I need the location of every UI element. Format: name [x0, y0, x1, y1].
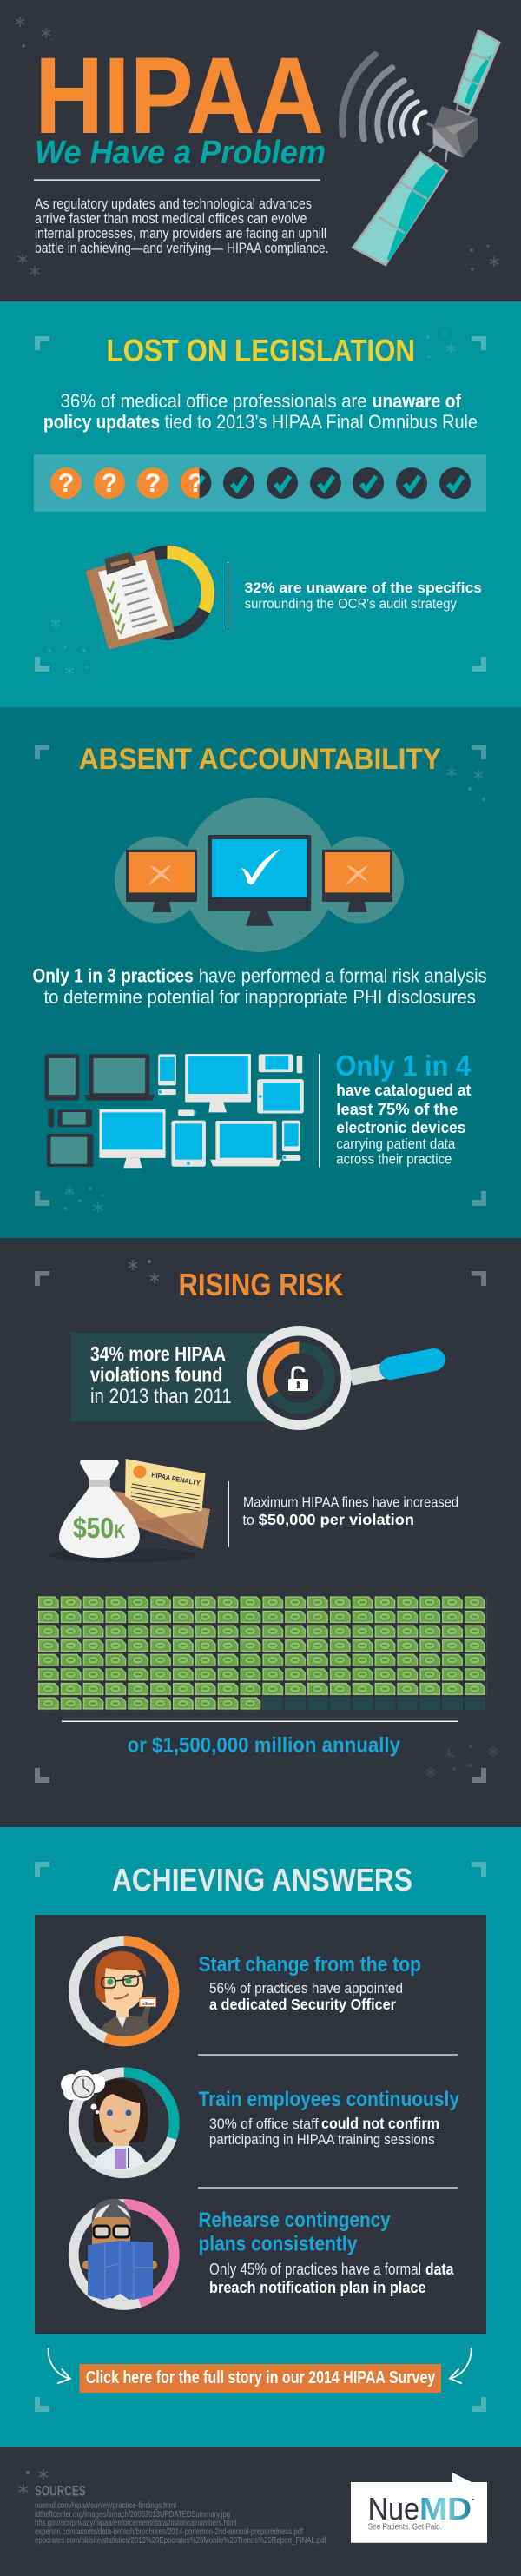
panel: header	[0, 0, 521, 301]
chart: 30% ring with doctor	[61, 2070, 175, 2173]
sources list: epocrates.com/oldsite/statistics/2013%20Epocrates%20Mobile%20Trends%20Report_FINAL.pdf	[35, 2535, 326, 2546]
callout: 34% more violations: in 2013 than 2011	[90, 1385, 232, 1408]
callout: 34% more violations: 34% more HIPAA	[90, 1343, 226, 1367]
recommendation text 1	[198, 1953, 421, 2013]
heading: LOST ON LEGISLATION	[106, 333, 415, 368]
icon: money bag and penalty letter: K	[115, 1520, 126, 1542]
icon group: devices	[45, 1054, 304, 1168]
stat text: 36% unaware: policy updates	[43, 411, 160, 433]
recommendation text 1: Start change from the top	[198, 1953, 421, 1977]
icon: money bag and penalty letter	[49, 1459, 210, 1562]
recommendation text 3: Only 45% of practices have a formal	[209, 2261, 421, 2278]
stat text: 1 in 4: electronic devices	[336, 1118, 465, 1136]
subtitle: We Have a Problem	[35, 135, 326, 171]
sources list: hhs.gov/ocr/privacy/hipaa/enforcement/data/historicalnumbers.html	[35, 2518, 236, 2528]
logo: NueMD	[351, 2473, 487, 2543]
icon bar: question marks and checks	[34, 454, 486, 512]
heading: ACHIEVING ANSWERS	[112, 1862, 412, 1897]
chart: 56% ring with officer	[74, 1941, 174, 2041]
arrow: left	[48, 2348, 70, 2383]
intro paragraph: internal processes, many providers are facing an uphill	[35, 226, 326, 242]
stat text: maximum fines: Maximum HIPAA fines have increased	[243, 1494, 458, 1510]
panel: footer	[0, 2447, 521, 2576]
stat text: maximum fines: to	[242, 1513, 254, 1528]
panel: absent accountability	[0, 707, 521, 1238]
logo: NueMD: Nue	[368, 2491, 419, 2526]
button: full story call to action: Click here for the full story in our 2014 HIPAA Survey	[86, 2368, 436, 2387]
panel: recommendations	[35, 1915, 486, 2334]
intro paragraph: battle in achieving—and verifying— HIPAA compliance.	[35, 241, 328, 256]
intro paragraph: As regulatory updates and technological advances	[35, 196, 312, 212]
sources list: experian.com/assets/data-breach/brochures/2014-ponemon-2nd-annual-preparedness.pdf	[35, 2526, 303, 2537]
panel: rising risk	[0, 1238, 521, 1827]
stat text: 1 in 3: to determine potential for inappropriate PHI disclosures	[43, 986, 476, 1008]
logo: NueMD: MD	[419, 2491, 472, 2526]
recommendation text 3: data	[425, 2261, 454, 2278]
stat text: 1 in 4: have catalogued at	[336, 1081, 471, 1099]
logo: NueMD: See Patients. Get Paid.	[368, 2522, 442, 2533]
sources list	[35, 2500, 326, 2546]
stat text: 1 in 4: across their practice	[336, 1152, 452, 1168]
sources list: nuemd.com/hipaa/survey/practice-findings.html	[35, 2500, 176, 2511]
stat text: 1 in 3: Only 1 in 3 practices	[33, 965, 194, 987]
recommendation text 1: a dedicated Security Officer	[209, 1996, 396, 2013]
icon: money bag and penalty letter: $50	[73, 1512, 114, 1544]
stat text: 1 in 4	[335, 1050, 472, 1168]
heading: RISING RISK	[179, 1267, 343, 1302]
stat text: 36% unaware	[43, 390, 478, 433]
recommendation text 2: Train employees continuously	[198, 2088, 460, 2111]
icon: clipboard	[87, 552, 173, 648]
recommendation text 3: breach notification plan in place	[209, 2279, 426, 2296]
stat text: maximum fines: $50,000 per violation	[259, 1511, 414, 1528]
callout: 34% more violations: violations found	[90, 1364, 222, 1387]
recommendation text 2: could not confirm	[321, 2115, 439, 2132]
stat text: annual total: or $1,500,000 million annually	[128, 1734, 401, 1758]
stat text: 1 in 4: Only 1 in 4	[335, 1050, 472, 1082]
stat text: 1 in 4: least 75% of the	[336, 1100, 458, 1118]
recommendation text 1: 56% of practices have appointed	[209, 1980, 403, 1997]
stat text: 36% unaware: 36% of medical office professionals are	[61, 390, 367, 412]
arrow: right	[450, 2348, 472, 2383]
sources list: idtheftcenter.org/images/breach/20052013UPDATEDSummary.jpg	[35, 2509, 230, 2520]
icon: satellite	[353, 30, 499, 265]
heading: ABSENT ACCOUNTABILITY	[79, 743, 441, 776]
recommendation text 3: Rehearse contingency	[198, 2208, 391, 2232]
icon: money bag and penalty letter: HIPAA PENALTY	[151, 1471, 201, 1487]
panel: lost on legislation	[0, 301, 521, 707]
stat text: 36% unaware: unaware of	[373, 390, 462, 412]
stat text: 1 in 3	[33, 965, 487, 1008]
callout: 34% more violations	[71, 1333, 288, 1421]
panel: achieving answers	[0, 1827, 521, 2447]
chart: 32% donut	[127, 553, 208, 634]
stat text: 36% unaware: tied to 2013’s HIPAA Final Omnibus Rule	[164, 411, 478, 433]
intro paragraph: arrive faster than most medical offices can evolve	[35, 211, 307, 227]
recommendation text 2	[198, 2088, 460, 2148]
chart: money grid	[38, 1596, 487, 1712]
recommendation text 3	[198, 2208, 454, 2296]
stat text: 32% unaware: surrounding the OCR's audit strategy	[245, 597, 457, 612]
button: full story call to action	[80, 2364, 441, 2393]
stat text: 32% unaware: 32% are unaware of the specifics	[245, 579, 482, 596]
icon: blue map	[88, 2241, 153, 2300]
icon: signal waves	[342, 55, 425, 141]
stat text: 1 in 4: carrying patient data	[336, 1136, 456, 1152]
icon: thought cloud clock	[61, 2070, 105, 2114]
stat text: 1 in 3: have performed a formal risk analysis	[199, 965, 487, 987]
icon: magnifying glass with lock	[247, 1326, 434, 1430]
icon: badge: Officer	[142, 2002, 154, 2006]
chart: 45% ring with map reader	[74, 2199, 175, 2305]
intro paragraph	[35, 196, 328, 256]
recommendation text 3: plans consistently	[198, 2233, 358, 2256]
stat text: maximum fines	[242, 1494, 458, 1528]
sources heading: SOURCES	[35, 2483, 86, 2500]
recommendation text 2: participating in HIPAA training sessions	[209, 2131, 435, 2148]
stat text: 32% unaware	[245, 579, 482, 612]
icon: monitors	[115, 798, 404, 952]
recommendation text 2: 30% of office staff	[209, 2116, 319, 2132]
title: HIPAA: HIPAA	[35, 36, 324, 156]
